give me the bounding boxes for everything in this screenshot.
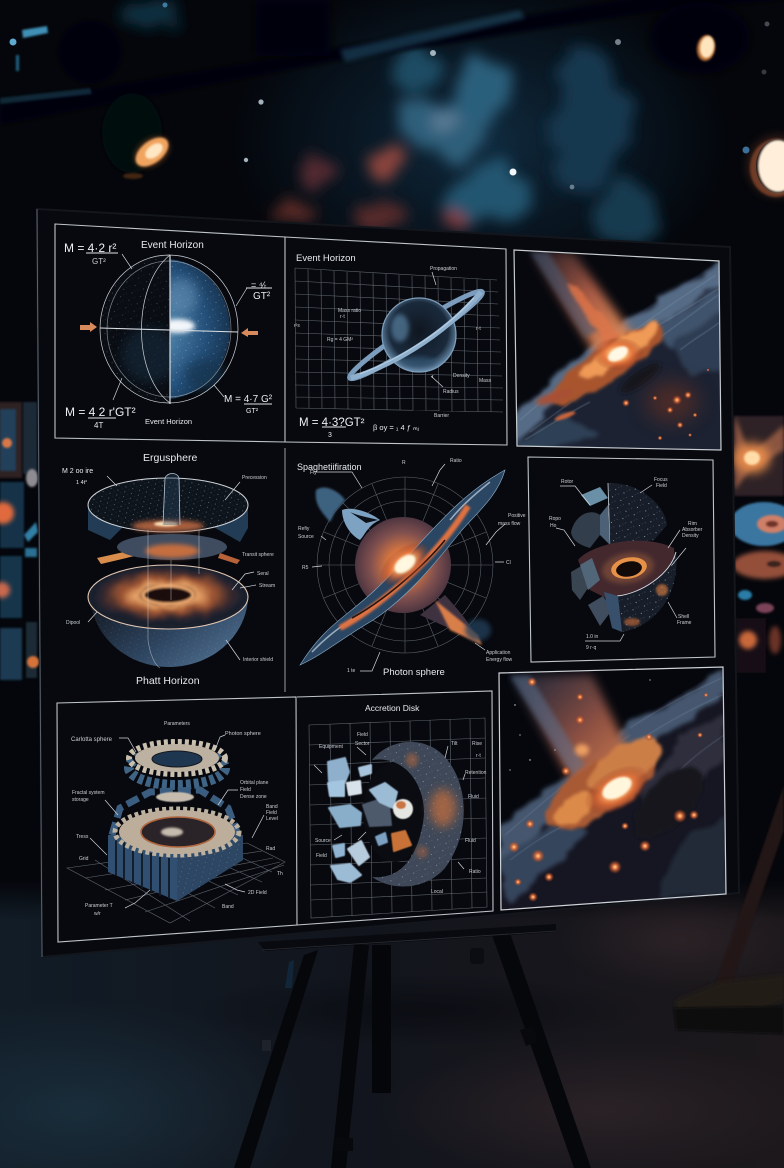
labels: Parameter T: [85, 903, 113, 909]
labels: Transit sphere: [242, 552, 274, 558]
labels: M = 4·3?GT²: [299, 417, 365, 429]
lower toothed block: [108, 790, 243, 901]
panel: accretion disk exploded crescent: [297, 691, 493, 925]
labels: Focus: [654, 477, 668, 483]
labels: β oy = ₁ 4 ƒ ₘⱼ: [373, 423, 419, 432]
labels: [314, 703, 487, 895]
labels: Band: [222, 904, 234, 910]
formulas and labels: GT²: [253, 291, 271, 302]
labels: Seral: [257, 571, 269, 577]
labels: Stream: [259, 583, 275, 589]
floor: [0, 880, 784, 1168]
formulas and labels: M = 4 2 r'GT²: [65, 405, 136, 419]
icon: orange arrows: [80, 322, 258, 337]
labels: Frame: [677, 620, 692, 626]
labels: storage: [72, 797, 89, 803]
labels: Accretion Disk: [365, 703, 420, 713]
ringed planet: [345, 284, 487, 386]
radial polar grid: [317, 477, 493, 653]
labels: 2D Field: [248, 890, 267, 896]
labels: Ratio: [450, 458, 462, 464]
labels: Energy flow: [486, 657, 513, 663]
debris shards: [316, 487, 491, 645]
labels: Fluid: [465, 838, 476, 844]
labels: Retention: [465, 770, 487, 776]
panel: event horizon ringed planet on grid: [285, 237, 507, 445]
labels: Level: [266, 816, 278, 822]
labels: Ropo: [549, 516, 561, 522]
labels: Rg = 4 GM²: [327, 337, 353, 343]
labels: Dense zone: [240, 794, 267, 800]
labels: 1.0 in: [586, 634, 598, 640]
labels: Cl: [506, 560, 511, 566]
labels: Field: [240, 787, 251, 793]
labels: Radius: [443, 389, 459, 395]
labels: Ho: [550, 523, 557, 529]
board: main dark poster frame: [37, 209, 739, 957]
top disk: [88, 474, 248, 542]
labels: r·t: [340, 314, 345, 320]
labels: Interior shield: [243, 657, 273, 663]
labels: Fractal system: [72, 790, 105, 796]
panel: ergosphere layered diagram: [62, 452, 275, 687]
labels: Field: [357, 732, 368, 738]
formulas and labels: M = 4·7 G²: [224, 394, 273, 405]
panel: accretion jet illustration top right: [510, 245, 725, 455]
labels: Fluid: [468, 794, 479, 800]
labels: Density: [453, 373, 470, 379]
labels: Positive: [508, 513, 526, 519]
display easel: [234, 924, 591, 1168]
labels: 9 r·q: [586, 645, 596, 651]
labels: Spaghetiifiration: [297, 462, 362, 472]
formulas and labels: 4T: [94, 421, 103, 430]
labels: Mass ratio: [338, 308, 361, 314]
dark lighting truss: [0, 0, 784, 125]
labels: 3: [328, 432, 332, 439]
labels: Dipool: [66, 620, 80, 626]
labels: Precession: [242, 475, 267, 481]
crescent shell: [363, 742, 464, 887]
labels: Source: [315, 838, 331, 844]
grid: [295, 268, 503, 412]
labels: r²s: [294, 323, 300, 329]
wooden easel and platform in background: [674, 785, 784, 1034]
labels: Refiy: [298, 526, 310, 532]
labels: Fly: [310, 470, 317, 476]
labels: Shell: [678, 614, 689, 620]
labels: Sector: [355, 741, 370, 747]
labels: Carlotta sphere: [71, 737, 113, 743]
labels: Event Horizon: [296, 253, 356, 264]
panel: event horizon sphere diagram: [55, 224, 285, 442]
labels: Rim: [688, 521, 697, 527]
labels: Application: [486, 650, 511, 656]
labels: [62, 452, 275, 687]
labels: Tilt: [451, 741, 458, 747]
labels: Rotor: [561, 479, 574, 485]
labels: 1 te: [347, 668, 356, 674]
labels: Photon sphere: [383, 667, 445, 678]
labels: Equipment: [319, 744, 344, 750]
labels: Rad: [266, 846, 275, 852]
labels: [71, 721, 283, 917]
labels: [549, 477, 703, 651]
panel: cutaway sphere inset: [528, 457, 715, 662]
labels: Rise: [472, 741, 482, 747]
labels: R5: [302, 565, 309, 571]
grid: [309, 718, 487, 918]
formulas and labels: M = 4·2 r²: [64, 241, 116, 255]
labels: Field: [316, 853, 327, 859]
middle disk with orange bands: [97, 534, 240, 564]
labels: Ratio: [469, 869, 481, 875]
upper gear ring: [129, 742, 225, 785]
formulas and labels: Event Horizon: [145, 417, 192, 426]
cutaway model: [571, 483, 677, 632]
labels: Source: [298, 534, 314, 540]
labels: Density: [682, 533, 699, 539]
cubes: [328, 758, 413, 882]
labels: Absorber: [682, 527, 703, 533]
panel: spaghettification sphere: [285, 448, 526, 692]
labels: Orbital plane: [240, 780, 269, 786]
formulas and labels: GT²: [246, 408, 259, 415]
formulas and labels: = ⁴⁄ₜ: [251, 280, 267, 290]
left background monitors: [0, 402, 39, 680]
hemisphere and accretion ring: [88, 530, 248, 668]
labels: Field: [266, 810, 277, 816]
right background monitors: [730, 416, 784, 673]
labels: Mass: [479, 378, 491, 384]
labels: r·t: [476, 753, 481, 759]
labels: Ergusphere: [143, 452, 197, 464]
panel: gear block cross-section: [57, 697, 297, 942]
labels: Local: [431, 889, 443, 895]
central sphere: [355, 517, 451, 613]
labels: Barrier: [434, 413, 449, 419]
labels: r·t: [476, 326, 481, 332]
ring band: [300, 470, 505, 665]
bokeh stars: [10, 2, 770, 189]
labels: Photon sphere: [225, 731, 261, 737]
panel: galaxy jet illustration bottom right: [495, 665, 730, 915]
labels: mass flow: [498, 521, 521, 527]
labels: Grid: [79, 856, 89, 862]
labels: w/r: [94, 911, 101, 917]
spotlights: [123, 34, 784, 197]
labels: Band: [266, 804, 278, 810]
floor grid: [67, 843, 285, 923]
labels: Tress: [76, 834, 89, 840]
labels: M 2 oo ire: [62, 468, 93, 475]
labels: Field: [656, 483, 667, 489]
formulas and labels: Event Horizon: [141, 240, 204, 251]
labels: [294, 253, 491, 439]
labels: 1 4t°: [76, 480, 87, 486]
sphere cross-section: [100, 255, 239, 404]
labels: Parameters: [164, 721, 190, 727]
labels: Propagation: [430, 266, 457, 272]
labels: R: [402, 460, 406, 466]
labels: Phatt Horizon: [136, 675, 200, 687]
labels: Th: [277, 871, 283, 877]
labels: [297, 458, 526, 678]
formulas and labels: GT²: [92, 257, 106, 266]
formulas and labels: [64, 240, 273, 430]
